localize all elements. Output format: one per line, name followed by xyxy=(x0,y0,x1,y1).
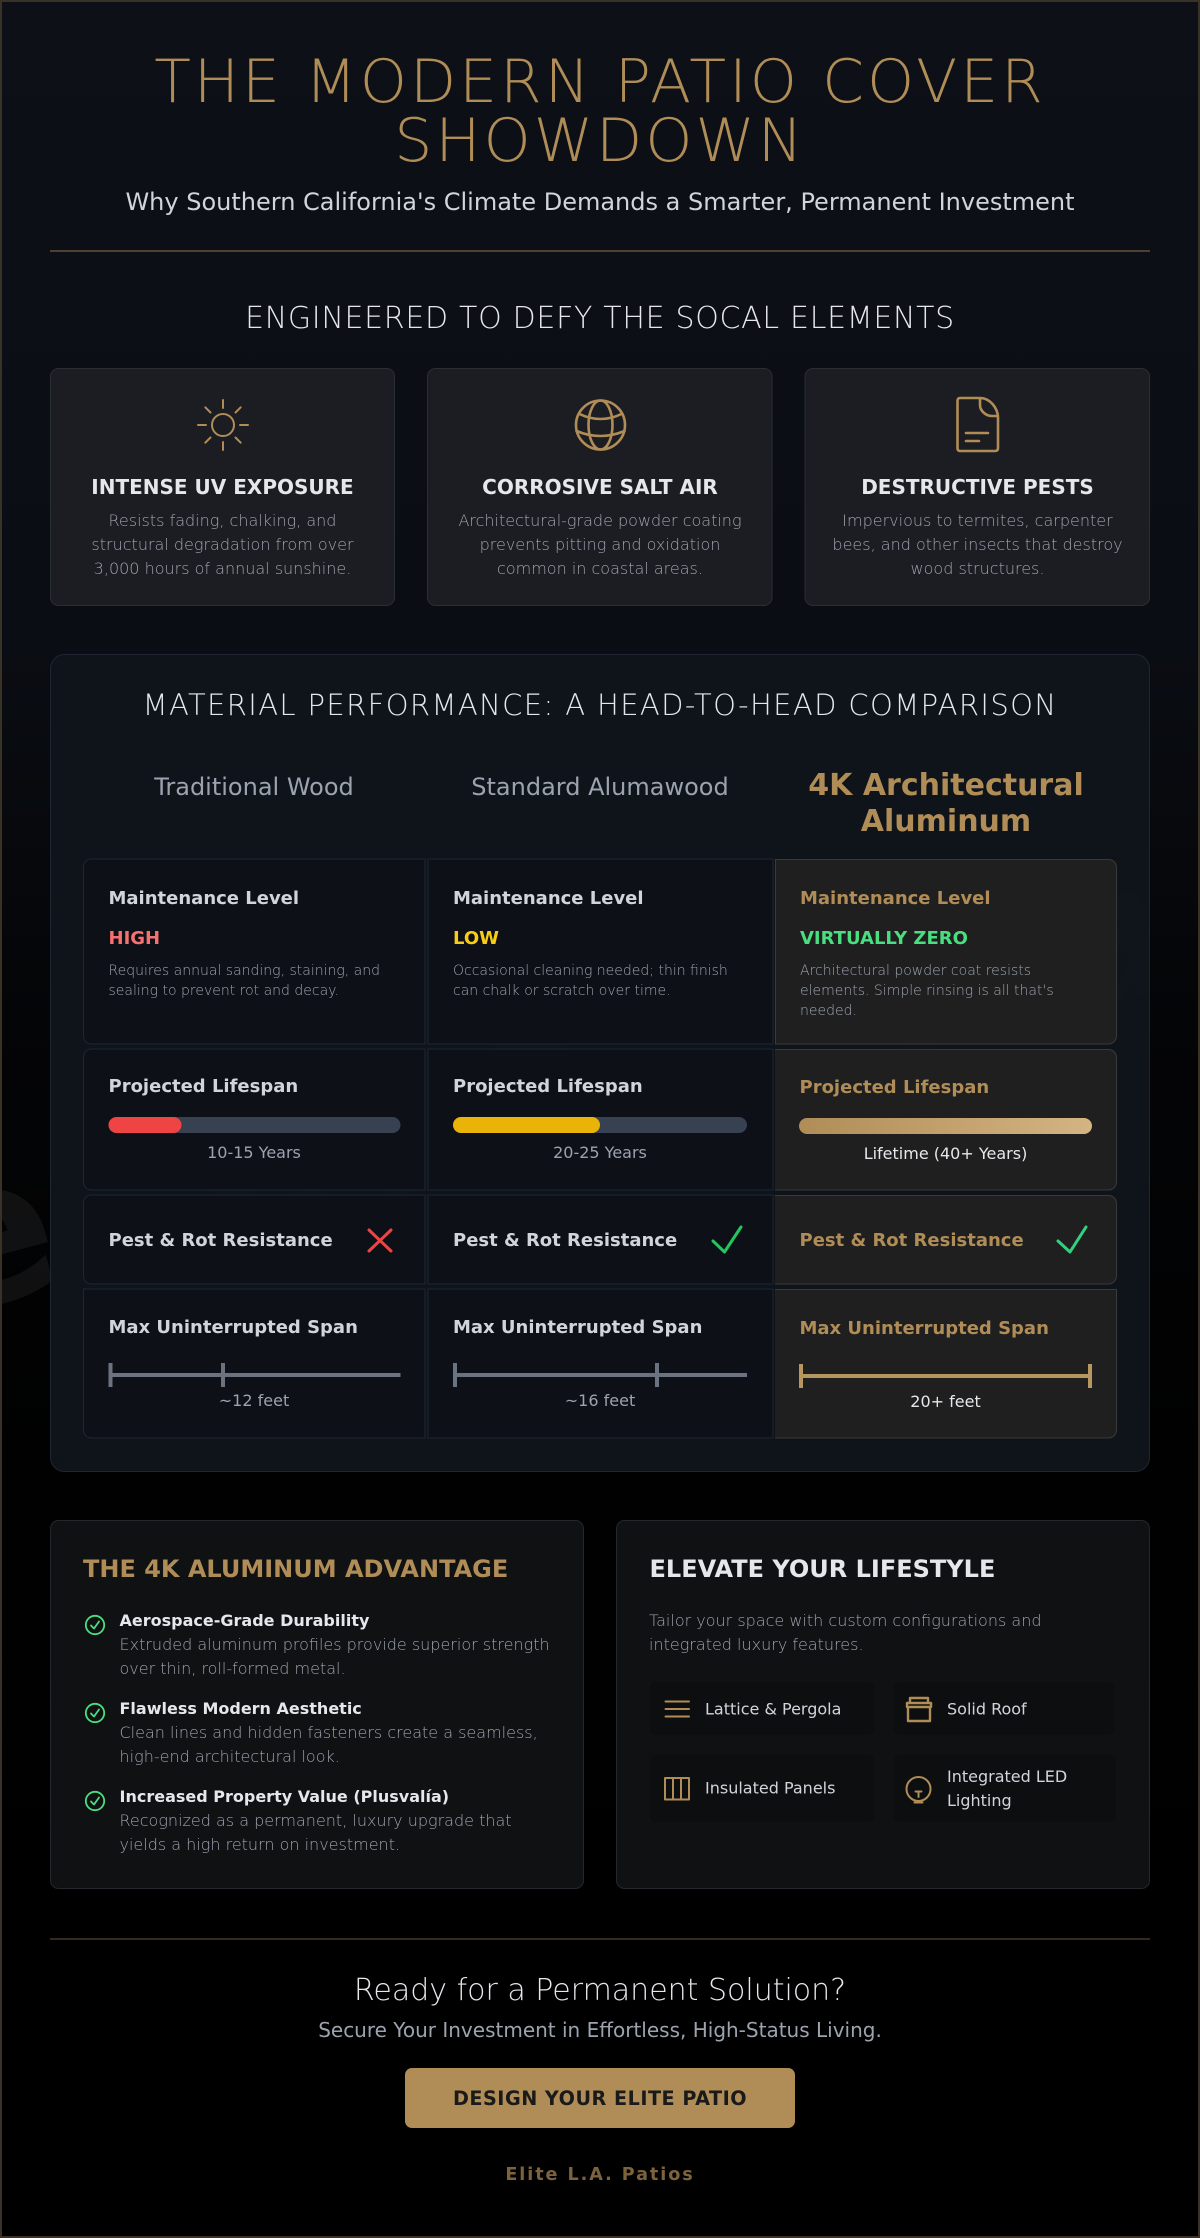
column header: 4K architectural aluminum: 4K Architectural xyxy=(808,768,1084,803)
benefit: durability xyxy=(86,1611,550,1678)
card title: DESTRUCTIVE PESTS xyxy=(861,475,1094,499)
cell: aluminum lifespan: Projected Lifespan xyxy=(800,1077,989,1098)
cell: alumawood span xyxy=(428,1289,773,1438)
benefit: durability: over thin, roll-formed metal. xyxy=(120,1659,346,1678)
column header: traditional wood: Traditional Wood xyxy=(153,773,354,801)
panel: material comparison xyxy=(50,654,1150,1472)
title: THE MODERN PATIO COVER xyxy=(154,47,1046,117)
panel: intense UV exposure xyxy=(50,368,394,606)
card description xyxy=(458,511,742,578)
column: 4K architectural aluminum xyxy=(775,860,1116,1438)
icon: check circle xyxy=(86,1704,104,1722)
option: solid roof xyxy=(894,1682,1114,1735)
brand footer: Elite L.A. Patios xyxy=(505,2165,695,2185)
cell: wood maintenance: Requires annual sanding, staining, and xyxy=(108,963,380,979)
cell: aluminum span xyxy=(775,1290,1116,1438)
subtitle: Why Southern California's Climate Demands a Smarter, Permanent Investment xyxy=(125,188,1075,216)
cell: alumawood pest resistance: Pest & Rot Resistance xyxy=(453,1230,677,1251)
icon: globe xyxy=(576,400,625,450)
panel: elevate your lifestyle xyxy=(616,1520,1150,1888)
card description: Architectural-grade powder coating xyxy=(458,511,742,530)
benefit: aesthetic: Flawless Modern Aesthetic xyxy=(120,1699,362,1718)
cell: alumawood maintenance: Occasional cleaning needed; thin finish xyxy=(453,963,728,979)
cell: wood span xyxy=(84,1289,425,1438)
cell: aluminum pest resistance xyxy=(775,1196,1116,1284)
column header: 4K architectural aluminum: Aluminum xyxy=(861,804,1031,839)
icon: check circle xyxy=(86,1616,104,1634)
cell: alumawood lifespan: 20-25 Years xyxy=(553,1143,647,1162)
icon: check circle xyxy=(86,1792,104,1810)
cell: alumawood span: Max Uninterrupted Span xyxy=(453,1317,702,1338)
button: DESIGN YOUR ELITE PATIO xyxy=(453,2087,747,2110)
cell: wood pest resistance: Pest & Rot Resistance xyxy=(108,1230,333,1251)
column: traditional wood xyxy=(84,859,425,1438)
column header: standard alumawood: Standard Alumawood xyxy=(471,773,729,801)
cell: alumawood maintenance: LOW xyxy=(453,928,499,949)
icon: light bulb xyxy=(906,1777,930,1802)
panel: corrosive salt air xyxy=(428,368,772,606)
option: insulated panels: Insulated Panels xyxy=(705,1778,835,1798)
cell: aluminum maintenance: Architectural powder coat resists xyxy=(800,963,1031,979)
card description: common in coastal areas. xyxy=(497,559,703,578)
cell: wood maintenance: HIGH xyxy=(108,928,160,949)
benefit: property value: Increased Property Value (Plusvalía) xyxy=(120,1787,449,1806)
card description: prevents pitting and oxidation xyxy=(480,535,720,554)
cell: wood maintenance: sealing to prevent rot and decay. xyxy=(108,983,339,999)
title: SHOWDOWN xyxy=(394,106,806,176)
cell: alumawood maintenance: Maintenance Level xyxy=(453,888,644,909)
icon: lattice xyxy=(666,1702,689,1716)
card description xyxy=(832,511,1123,578)
cell: aluminum span: Max Uninterrupted Span xyxy=(800,1318,1049,1339)
benefit: durability: Aerospace-Grade Durability xyxy=(120,1611,370,1630)
panel: destructive pests xyxy=(805,368,1150,606)
panel: the 4K aluminum advantage xyxy=(50,1520,584,1888)
option: integrated LED lighting: Integrated LED xyxy=(947,1767,1067,1786)
option: lattice and pergola xyxy=(650,1682,874,1735)
cell: alumawood maintenance xyxy=(428,859,773,1044)
benefit: aesthetic xyxy=(86,1699,538,1766)
card description: Impervious to termites, carpenter xyxy=(842,511,1113,530)
card description xyxy=(91,511,354,578)
cell: wood maintenance: Maintenance Level xyxy=(108,888,299,909)
cell: aluminum maintenance: VIRTUALLY ZERO xyxy=(800,928,968,949)
cell: alumawood lifespan: Projected Lifespan xyxy=(453,1076,643,1097)
option: insulated panels xyxy=(650,1755,874,1822)
heading: engineered section: ENGINEERED TO DEFY THE SOCAL ELEMENTS xyxy=(245,301,955,336)
cell: aluminum maintenance xyxy=(776,860,1116,1044)
cell: aluminum span: 20+ feet xyxy=(910,1392,981,1411)
comparison heading: MATERIAL PERFORMANCE: A HEAD-TO-HEAD COMPARISON xyxy=(143,688,1057,722)
card description: wood structures. xyxy=(911,559,1044,578)
card description: 3,000 hours of annual sunshine. xyxy=(94,559,351,578)
benefit: property value: Recognized as a permanent, luxury upgrade that xyxy=(120,1811,512,1830)
icon: solid roof xyxy=(907,1698,931,1721)
lifestyle intro xyxy=(649,1611,1042,1654)
cell: alumawood maintenance: can chalk or scratch over time. xyxy=(453,983,671,999)
icon: sun xyxy=(198,400,248,450)
cell: alumawood pest resistance xyxy=(428,1195,773,1284)
cell: aluminum pest resistance: Pest & Rot Resistance xyxy=(800,1230,1024,1251)
card description: bees, and other insects that destroy xyxy=(832,535,1123,554)
cell: alumawood lifespan xyxy=(428,1049,773,1190)
lifestyle heading: ELEVATE YOUR LIFESTYLE xyxy=(650,1555,995,1583)
cell: wood span: ~12 feet xyxy=(219,1391,289,1410)
call to action heading: Ready for a Permanent Solution? xyxy=(354,1973,846,2008)
option: integrated LED lighting: Lighting xyxy=(947,1791,1012,1810)
option: solid roof: Solid Roof xyxy=(947,1700,1027,1718)
benefit: aesthetic: Clean lines and hidden fasteners create a seamless, xyxy=(120,1723,538,1742)
icon: document xyxy=(958,398,998,451)
benefit: aesthetic: high-end architectural look. xyxy=(120,1747,340,1766)
cell: aluminum maintenance: elements. Simple rinsing is all that's xyxy=(800,983,1054,999)
column: standard alumawood xyxy=(428,859,773,1438)
cell: aluminum maintenance: needed. xyxy=(800,1003,857,1019)
call to action subtext: Secure Your Investment in Effortless, High-Status Living. xyxy=(318,2018,882,2042)
cell: wood lifespan: Projected Lifespan xyxy=(108,1076,298,1097)
card title: CORROSIVE SALT AIR xyxy=(482,475,718,499)
cell: alumawood span: ~16 feet xyxy=(565,1391,635,1410)
benefit: property value xyxy=(86,1787,512,1854)
cell: aluminum lifespan xyxy=(775,1050,1116,1190)
benefit: property value: yields a high return on investment. xyxy=(120,1835,400,1854)
icon: insulated panels xyxy=(665,1778,689,1800)
option: lattice and pergola: Lattice & Pergola xyxy=(705,1700,841,1718)
column header: 4K architectural aluminum xyxy=(808,768,1084,839)
cell: wood lifespan: 10-15 Years xyxy=(207,1143,301,1162)
button xyxy=(405,2068,795,2128)
cell: wood span: Max Uninterrupted Span xyxy=(108,1317,358,1338)
cell: wood pest resistance xyxy=(84,1195,425,1284)
card description: structural degradation from over xyxy=(91,535,354,554)
cell: aluminum maintenance: Maintenance Level xyxy=(800,888,991,909)
advantage heading: THE 4K ALUMINUM ADVANTAGE xyxy=(83,1555,508,1583)
card title: INTENSE UV EXPOSURE xyxy=(91,475,354,499)
benefit: durability: Extruded aluminum profiles provide superior strength xyxy=(120,1635,550,1654)
cell: aluminum lifespan: Lifetime (40+ Years) xyxy=(864,1144,1027,1163)
option: integrated LED lighting xyxy=(894,1755,1116,1822)
card description: Resists fading, chalking, and xyxy=(109,511,336,530)
lifestyle intro: integrated luxury features. xyxy=(649,1635,864,1654)
cell: wood maintenance xyxy=(84,859,425,1044)
cell: wood lifespan xyxy=(84,1049,425,1190)
title xyxy=(154,47,1046,176)
lifestyle intro: Tailor your space with custom configurations and xyxy=(649,1611,1042,1630)
